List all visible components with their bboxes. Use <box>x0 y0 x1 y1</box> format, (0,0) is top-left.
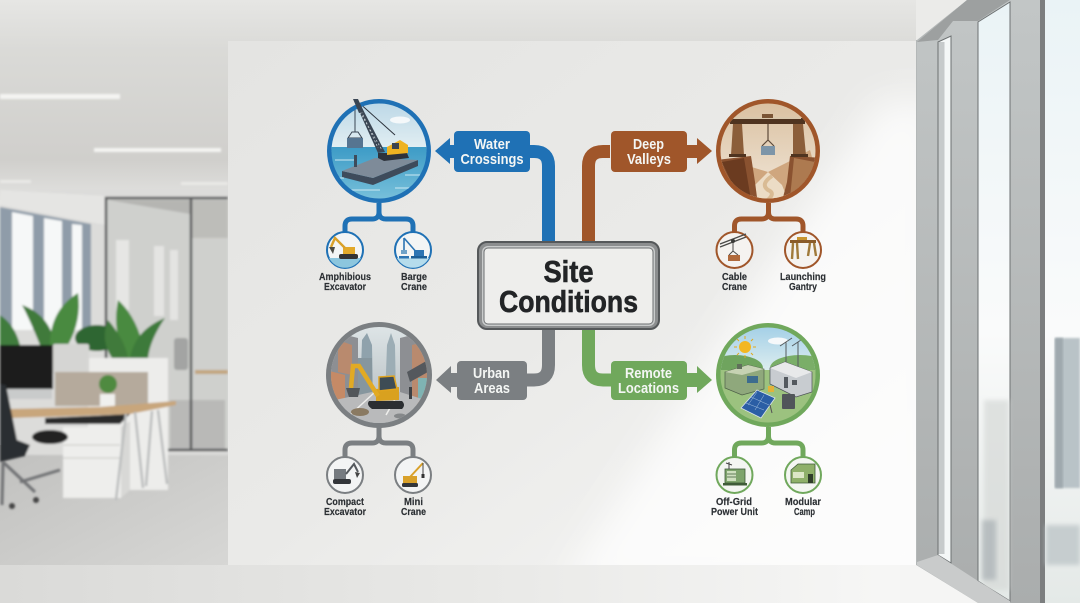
label: launching gantry <box>780 272 826 293</box>
connector: water <box>528 152 548 243</box>
wall <box>228 41 916 565</box>
label: barge crane: Crane <box>401 282 427 293</box>
label: deep valleys <box>611 131 712 172</box>
planter and partition <box>88 358 168 490</box>
monitor <box>0 345 53 389</box>
left windows <box>0 207 91 330</box>
outside view <box>1045 0 1080 603</box>
wall light <box>590 102 916 565</box>
label: cable crane: Crane <box>722 282 747 293</box>
window pane 1 <box>938 36 951 563</box>
panel: remote locations <box>611 323 830 518</box>
chair <box>0 384 30 462</box>
plants <box>0 293 165 358</box>
label: modular camp: Modular <box>785 497 821 508</box>
label: amphibious excavator: Amphibious <box>319 272 371 283</box>
branch lines <box>734 427 803 457</box>
label: compact excavator: Excavator <box>324 507 366 518</box>
label: modular camp <box>785 497 821 518</box>
label: deep valleys: Deep <box>633 136 664 153</box>
desk <box>9 401 176 418</box>
icon: launching gantry <box>785 232 821 268</box>
crane boom tip over the ring <box>353 99 364 113</box>
background: ceiling <box>0 0 1080 200</box>
bottom floor <box>0 565 978 603</box>
title: Site <box>544 254 594 289</box>
label: water crossings <box>435 131 530 172</box>
label: water crossings: Water <box>474 136 510 153</box>
label: off-grid power unit: Power Unit <box>711 507 759 518</box>
icon: modular camp <box>785 457 821 493</box>
icon: cable crane <box>716 232 752 268</box>
panel: water crossings <box>319 99 530 293</box>
icon: compact excavator <box>327 457 363 493</box>
icon: modular camp scene <box>716 323 820 427</box>
label: remote locations: Remote <box>625 365 672 382</box>
branch lines <box>345 203 413 232</box>
label: launching gantry: Gantry <box>789 282 817 293</box>
panel: deep valleys <box>611 99 826 293</box>
label: urban areas: Urban <box>473 365 510 382</box>
background: floor <box>0 445 240 570</box>
label: urban areas: Areas <box>474 380 510 397</box>
label: remote locations: Locations <box>618 380 679 397</box>
connector: remote <box>588 328 612 380</box>
label: remote locations <box>611 361 712 400</box>
background: right windows <box>900 0 1080 603</box>
label: barge crane <box>401 272 427 293</box>
label: mini crane: Crane <box>401 507 426 518</box>
connector: urban <box>525 328 548 380</box>
icon: mini crane <box>395 457 431 493</box>
central box <box>478 242 659 329</box>
label: launching gantry: Launching <box>780 272 826 283</box>
connector: valleys <box>588 152 610 243</box>
label: cable crane <box>722 272 747 293</box>
ceiling lights <box>0 94 228 185</box>
connectors <box>525 152 612 380</box>
icon: crane barge <box>327 99 431 204</box>
icon: excavator in city street <box>326 322 432 428</box>
icon: amphibious excavator <box>327 232 363 268</box>
title: Conditions <box>499 284 638 319</box>
label: cable crane: Cable <box>722 272 747 283</box>
window pane 2 <box>978 2 1010 601</box>
label: compact excavator: Compact <box>326 497 365 508</box>
label: amphibious excavator <box>319 272 371 293</box>
label: modular camp: Camp <box>794 507 815 518</box>
label: barge crane: Barge <box>401 272 427 283</box>
label: off-grid power unit: Off-Grid <box>716 497 752 508</box>
panel: urban areas <box>324 322 527 518</box>
label: water crossings: Crossings <box>460 151 524 168</box>
label: amphibious excavator: Excavator <box>324 282 366 293</box>
label: off-grid power unit <box>711 497 759 518</box>
label: compact excavator <box>324 497 366 518</box>
background: left office <box>0 94 230 509</box>
glass partition <box>106 198 228 450</box>
small plant <box>99 375 117 393</box>
branch lines <box>734 203 803 232</box>
branch lines <box>345 427 413 457</box>
label: urban areas <box>436 361 527 400</box>
label: deep valleys: Valleys <box>627 151 671 168</box>
label: mini crane <box>401 497 426 518</box>
icon: off-grid power unit <box>716 457 752 493</box>
icon: barge crane <box>395 232 431 268</box>
title <box>499 254 638 319</box>
icon: gantry over valley <box>715 99 825 205</box>
label: mini crane: Mini <box>404 497 423 508</box>
